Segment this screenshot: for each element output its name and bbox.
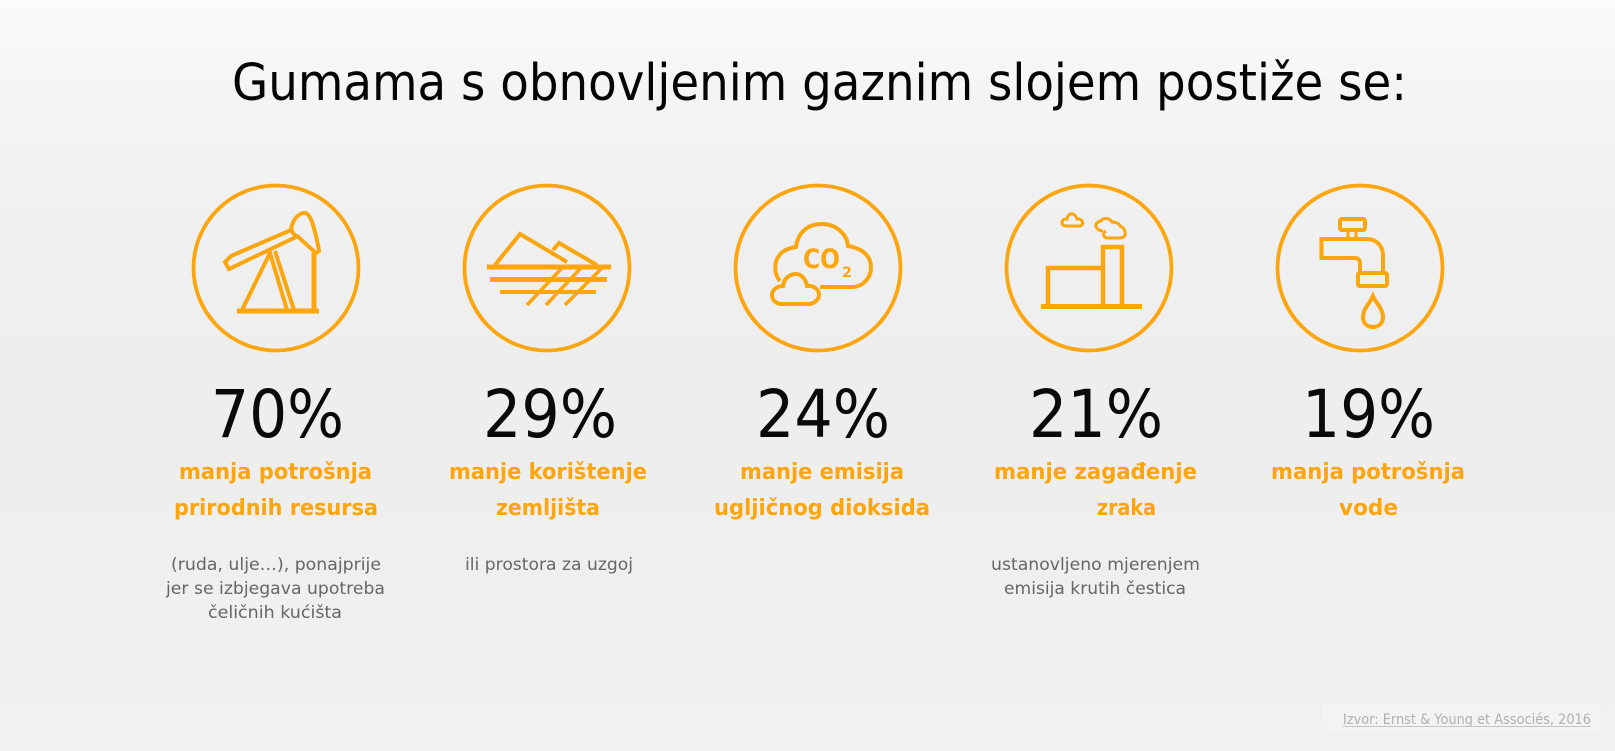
description: ili prostora za uzgoj [465,555,633,575]
source note: Izvor: Ernst & Young et Associés, 2016 [1343,712,1591,728]
percentage: 24%: 24% [756,376,890,453]
description [165,555,385,623]
orange label [174,460,378,521]
description: emisija krutih čestica [1004,579,1186,599]
orange label: manja potrošnja [1271,460,1465,485]
orange label: zemljišta [496,496,600,521]
orange label: prirodnih resursa [174,496,378,521]
orange label: zraka [1097,496,1156,521]
orange label [449,460,647,521]
panel: air pollution [991,186,1200,599]
description [991,555,1200,599]
description: (ruda, ulje…), ponajprije [171,555,381,575]
icon: CO2 cloud: CO [803,244,840,275]
orange label [1271,460,1465,521]
percentage: 70%: 70% [211,376,344,453]
icon: fields [464,186,630,350]
icon: factory [1006,186,1172,350]
icon: CO2 cloud: 2 [842,265,852,281]
title: Gumama s obnovljenim gaznim slojem postiže se: [232,54,1407,113]
icon: oil pump [194,186,358,350]
description: jer se izbjegava upotreba [165,579,385,599]
orange label: ugljičnog dioksida [714,496,930,521]
icon: faucet [1278,186,1442,350]
panel: CO2 emissions [714,186,930,521]
orange label: manje emisija [740,460,904,485]
percentage: 19%: 19% [1302,376,1435,453]
panel: water use [1271,186,1465,521]
orange label: vode [1339,496,1398,521]
description: čeličnih kućišta [208,603,342,623]
panel: land use [449,186,647,575]
orange label [994,460,1197,521]
orange label: manja potrošnja [179,460,372,485]
percentage: 29%: 29% [483,376,617,453]
description: ustanovljeno mjerenjem [991,555,1200,575]
percentage: 21%: 21% [1029,376,1163,453]
panel: natural resources [165,186,385,623]
source note [1322,704,1601,733]
orange label: manje korištenje [449,460,647,485]
orange label [714,460,930,521]
icon: CO2 cloud [736,186,900,350]
orange label: manje zagađenje [994,460,1197,485]
